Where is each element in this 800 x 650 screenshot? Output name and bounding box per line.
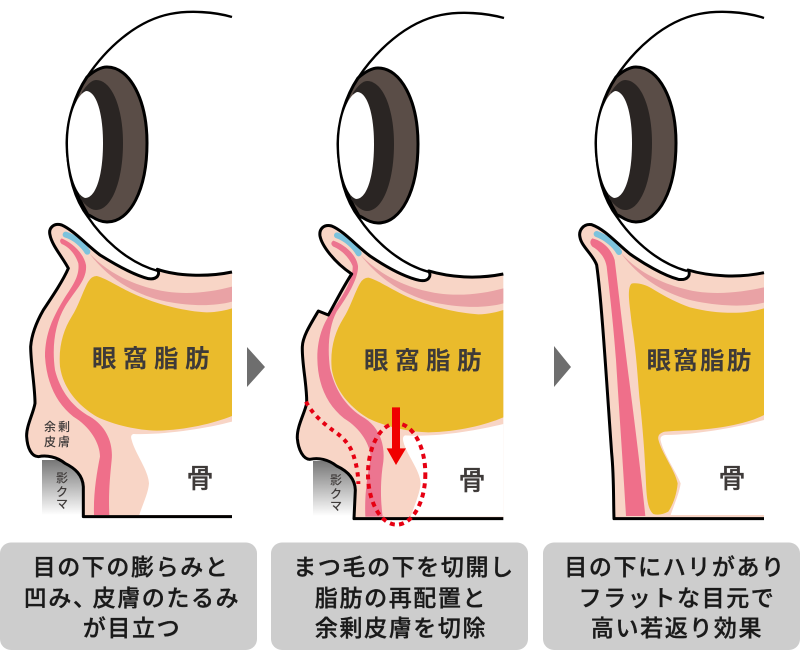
incision dotted line [306, 402, 358, 484]
icon: shadow under the eye [313, 461, 355, 516]
caption box: after [543, 542, 800, 650]
caption box: during: まつ毛の下を切開し [293, 554, 515, 580]
orbital fat [331, 278, 503, 432]
panel: after surgery [580, 12, 764, 519]
label: shadow [330, 473, 342, 513]
caption box: before: 目の下の膨らみと [33, 554, 229, 580]
caption box: during: 余剰皮膚を切除 [315, 615, 487, 641]
skin outline [27, 224, 232, 517]
septum band [361, 255, 503, 307]
skin [580, 225, 764, 519]
label: excess skin: 余剰 [44, 420, 72, 434]
label: bone: 骨 [186, 464, 214, 494]
label: shadow: ク [330, 487, 342, 501]
lower eyelid and cheek anatomy [297, 226, 503, 525]
label: orbital fat: 眼窩脂肪 [92, 345, 216, 373]
skin outline [580, 225, 764, 519]
label: orbital fat: 眼窩脂肪 [647, 347, 753, 375]
caption box: after: 高い若返り効果 [591, 615, 763, 641]
label: shadow: ク [56, 485, 68, 499]
label: excess skin: 皮膚 [44, 434, 72, 449]
orbicularis muscle [45, 238, 112, 515]
label: shadow [56, 471, 68, 511]
eye cross-section [596, 12, 764, 271]
caption box: during [271, 542, 528, 650]
caption box: during: 脂肪の再配置と [315, 585, 487, 611]
bone area [660, 420, 764, 515]
label: shadow: マ [330, 499, 342, 513]
skin [27, 224, 232, 517]
dotted ellipse: fat relocation [368, 423, 425, 525]
septum band [89, 253, 232, 305]
label: bone: 骨 [458, 466, 486, 496]
orbital fat [60, 276, 232, 431]
lower eyelid and cheek anatomy [580, 225, 764, 519]
skin [297, 226, 503, 519]
bone area [403, 424, 503, 517]
lower eyelid and cheek anatomy [27, 224, 232, 517]
caption box: before [0, 542, 257, 650]
label: shadow: 影 [56, 471, 68, 485]
bone area [131, 422, 232, 515]
arrow: first to second [247, 347, 265, 387]
label: shadow: マ [56, 497, 68, 511]
orbital fat [629, 283, 764, 515]
panel: during surgery [297, 13, 504, 525]
label: bone: 骨 [718, 464, 746, 494]
skin outline [297, 226, 503, 519]
caption box: before: 凹み、皮膚のたるみ [24, 585, 240, 611]
septum band [621, 253, 764, 306]
label: excess skin [44, 420, 72, 449]
tarsal plate [337, 235, 359, 253]
tarsal plate [66, 235, 87, 252]
arrow: fat moves down [387, 407, 406, 465]
icon: shadow under the eye [42, 460, 84, 515]
caption box: after: 目の下にハリがあり [564, 554, 786, 580]
tarsal plate [597, 234, 619, 252]
eye cross-section [67, 12, 232, 271]
caption box: after: フラットな目元で [579, 585, 775, 611]
eye cross-section [338, 13, 504, 272]
caption box: before: が目立つ [83, 615, 181, 641]
panel: before surgery [27, 12, 232, 517]
orbicularis muscle [590, 238, 645, 516]
label: orbital fat: 眼窩脂肪 [364, 347, 488, 375]
arrow: second to third [554, 346, 571, 387]
orbicularis muscle [317, 241, 384, 517]
label: shadow: 影 [330, 473, 342, 487]
